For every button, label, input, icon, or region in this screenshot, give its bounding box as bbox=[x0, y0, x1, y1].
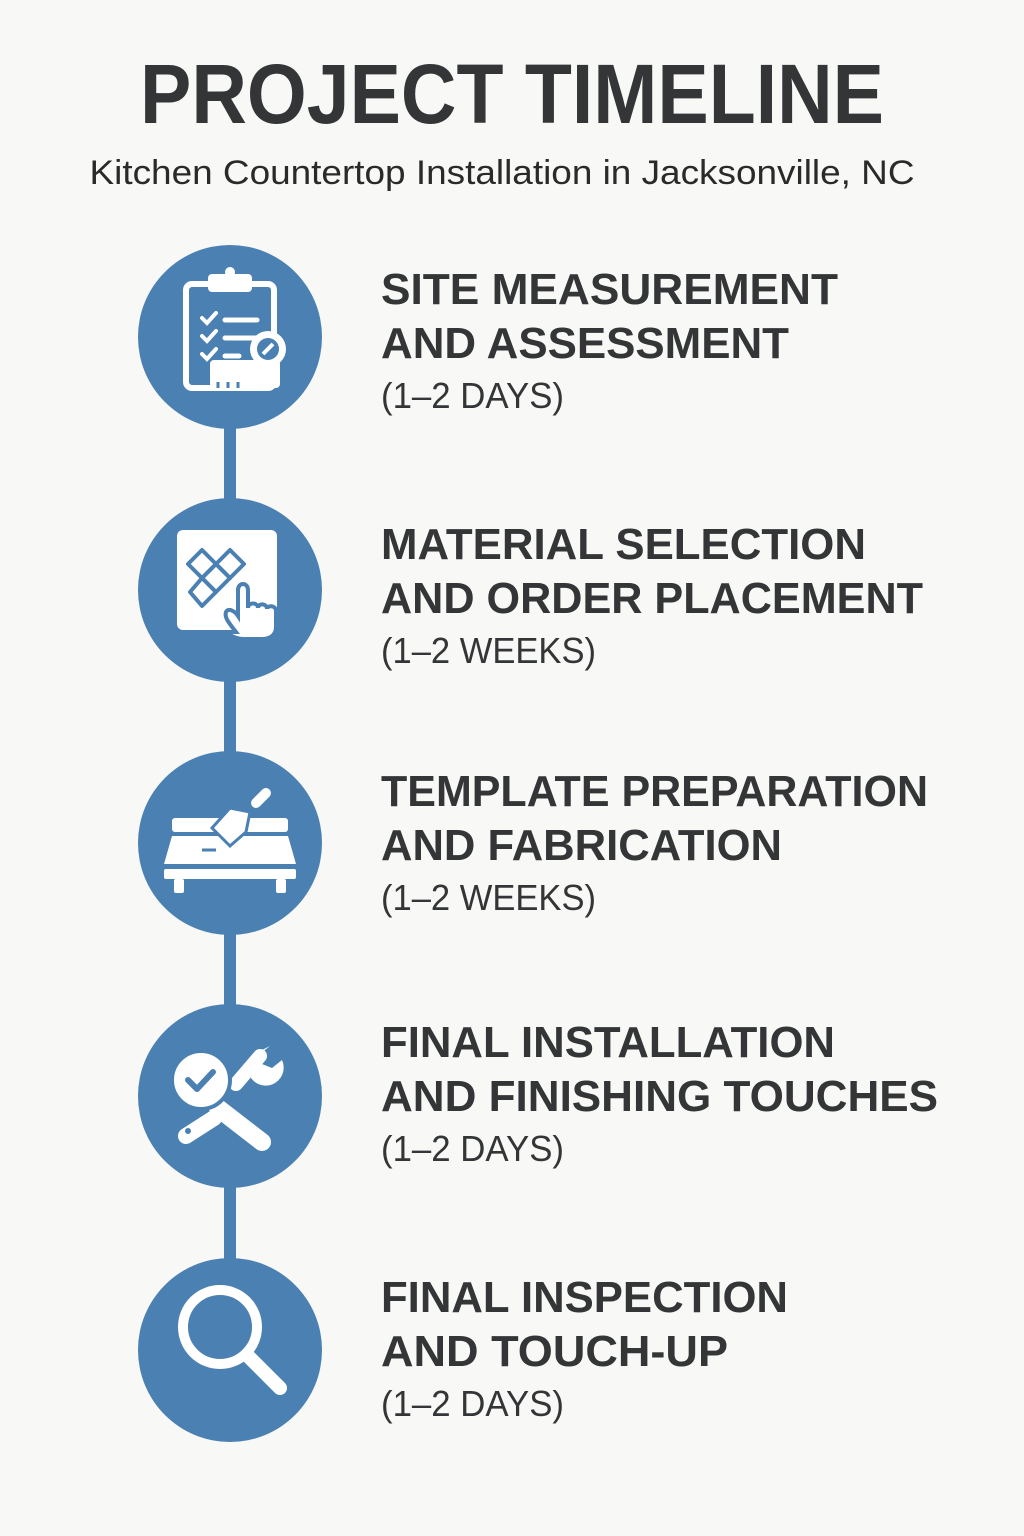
step 2: material selection bbox=[138, 498, 923, 682]
icon: magnifying glass bbox=[138, 1258, 322, 1442]
duration: (1–2 DAYS) bbox=[381, 1383, 564, 1424]
heading: FINAL INSPECTION bbox=[381, 1273, 788, 1322]
heading: AND TOUCH-UP bbox=[381, 1327, 728, 1376]
duration: (1–2 DAYS) bbox=[381, 1128, 564, 1169]
icon: check badge with wrench bbox=[138, 1004, 322, 1188]
heading: AND FINISHING TOUCHES bbox=[381, 1072, 938, 1121]
icon: clipboard with tape measure bbox=[138, 245, 322, 429]
heading: TEMPLATE PREPARATION bbox=[381, 767, 928, 816]
heading: SITE MEASUREMENT bbox=[381, 265, 838, 314]
duration: (1–2 WEEKS) bbox=[381, 877, 596, 918]
title: PROJECT TIMELINE bbox=[140, 47, 884, 141]
heading: MATERIAL SELECTION bbox=[381, 520, 866, 569]
timeline connector bbox=[224, 337, 236, 1350]
step 3: template fabrication bbox=[138, 751, 928, 935]
icon: tile sample with hand bbox=[138, 498, 322, 682]
heading: AND FABRICATION bbox=[381, 821, 782, 870]
duration: (1–2 WEEKS) bbox=[381, 630, 596, 671]
heading: FINAL INSTALLATION bbox=[381, 1018, 835, 1067]
step 1: site measurement bbox=[138, 245, 838, 429]
icon: fabrication table bbox=[138, 751, 322, 935]
subtitle: Kitchen Countertop Installation in Jacksonville, NC bbox=[90, 154, 914, 192]
step 4: final installation bbox=[138, 1004, 938, 1188]
step 5: final inspection bbox=[138, 1258, 788, 1442]
heading: AND ORDER PLACEMENT bbox=[381, 574, 923, 623]
duration: (1–2 DAYS) bbox=[381, 375, 564, 416]
heading: AND ASSESSMENT bbox=[381, 319, 789, 368]
